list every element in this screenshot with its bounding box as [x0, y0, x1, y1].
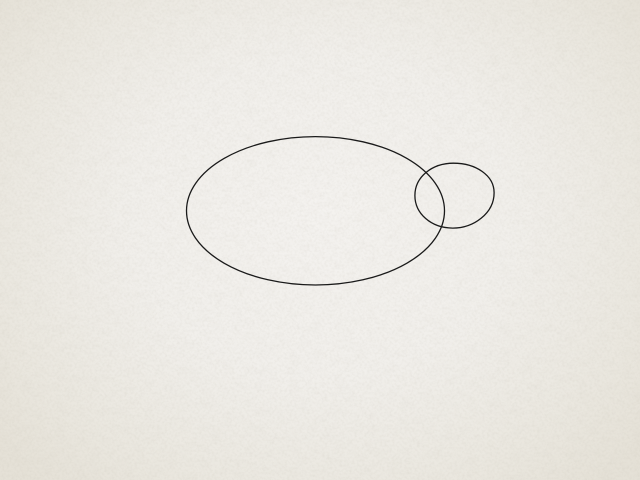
- diagram: overlapping ellipses: [186, 137, 494, 285]
- large ellipse: [186, 137, 444, 285]
- small ellipse: [415, 163, 494, 228]
